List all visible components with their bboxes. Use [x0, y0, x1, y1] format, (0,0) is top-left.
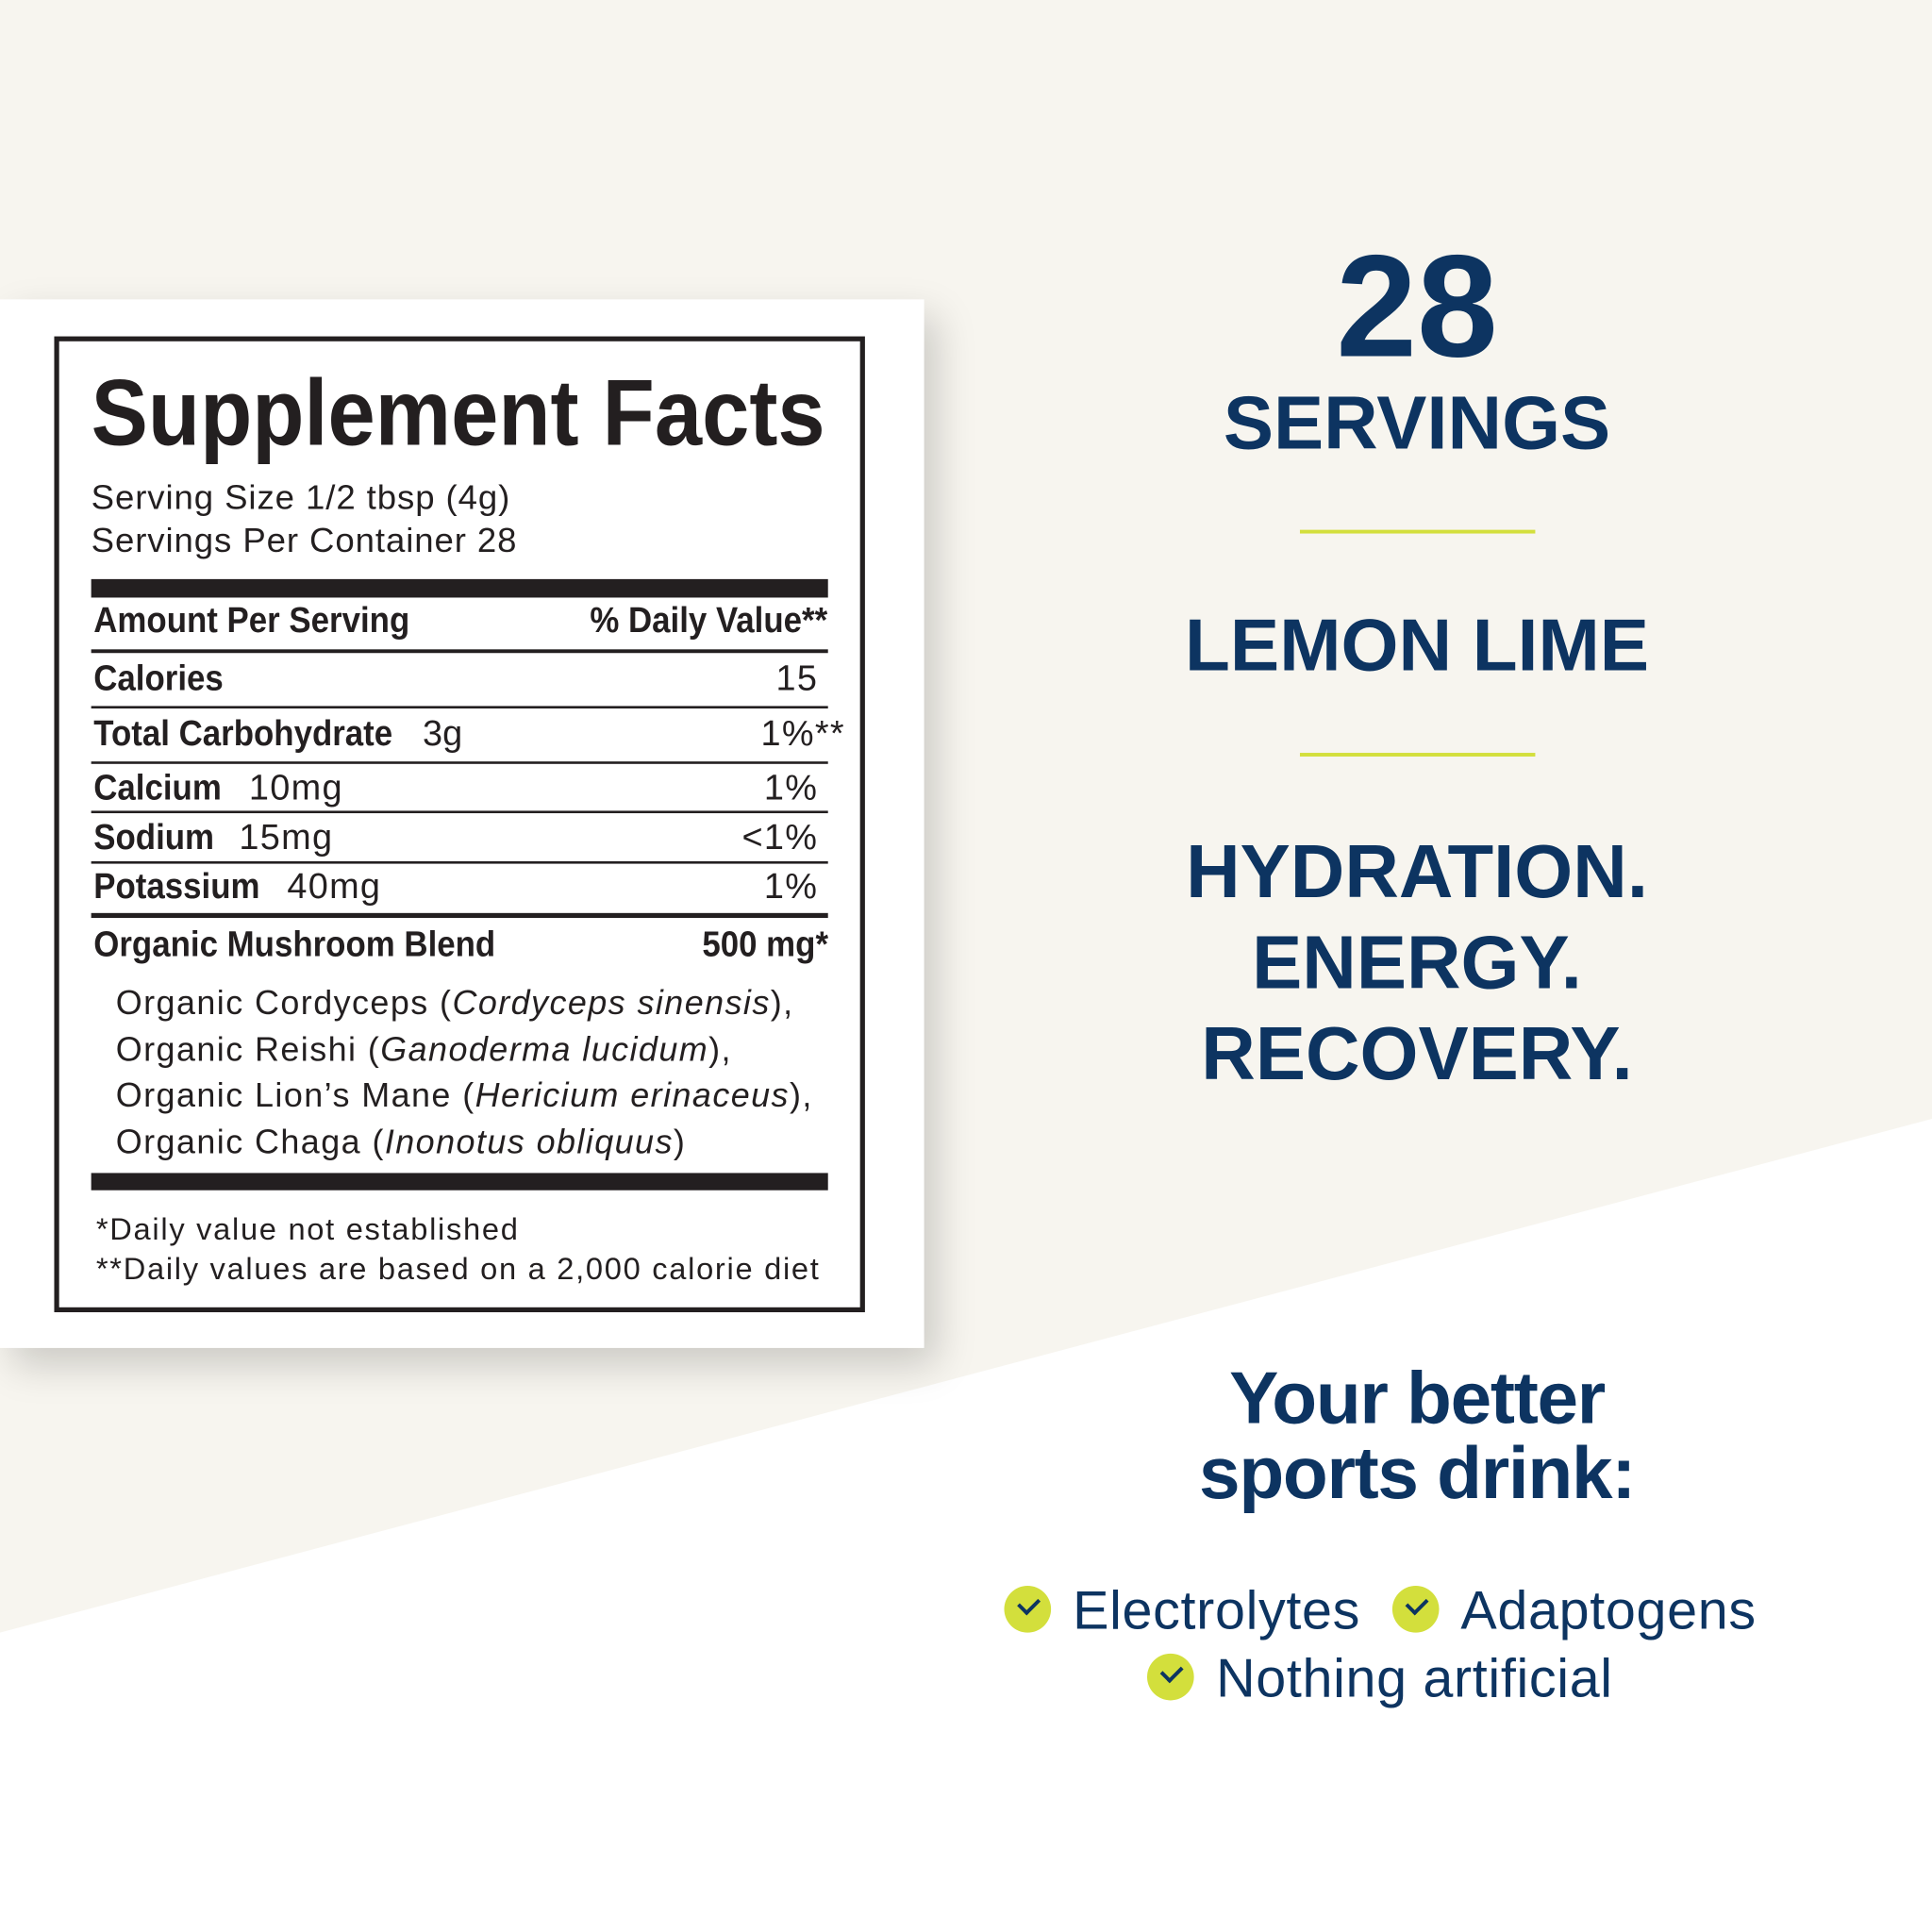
heading: hydration energy recovery: RECOVERY. [1201, 1011, 1633, 1095]
heading: hydration energy recovery [1186, 829, 1648, 1095]
text: ingredients: Organic Lion’s Mane (Hericium erinaceus), [116, 1076, 813, 1114]
heading: servings: SERVINGS [1224, 381, 1610, 464]
divider [1300, 530, 1535, 534]
serving info: Servings Per Container 28 [92, 521, 517, 559]
item: nothing artificial: Nothing artificial [1216, 1649, 1613, 1709]
row: sodium: 15mg [239, 818, 333, 858]
row: potassium: 1% [764, 868, 818, 907]
heading: your better sports drink [1199, 1357, 1635, 1514]
text: ingredients: Organic Reishi (Ganoderma lucidum), [116, 1030, 732, 1068]
row: calories: 15 [776, 659, 818, 699]
heading: Supplement Facts: Supplement Facts [92, 361, 825, 466]
row: sodium: Sodium [93, 818, 214, 858]
row: potassium [93, 868, 818, 907]
row: sodium [93, 818, 818, 858]
row: calcium: 1% [764, 769, 818, 808]
text: footnotes [96, 1212, 821, 1287]
heading: your better sports drink: Your better [1229, 1357, 1605, 1440]
heading: hydration energy recovery: ENERGY. [1252, 921, 1582, 1004]
panel: supplement facts label [54, 337, 865, 1312]
serving info: Serving Size 1/2 tbsp (4g) [92, 478, 510, 516]
divider [1300, 753, 1535, 757]
row: mushroom blend [93, 925, 828, 965]
row: potassium: Potassium [93, 868, 260, 907]
row: mushroom blend: Organic Mushroom Blend [93, 925, 495, 965]
row: potassium: 40mg [287, 868, 381, 907]
text: footnotes: *Daily value not established [96, 1212, 520, 1247]
row: carbohydrate: Total Carbohydrate [93, 715, 392, 754]
row: header: % Daily Value** [591, 601, 828, 641]
item: adaptogens: Electrolytes Adaptogens [1073, 1581, 1757, 1641]
serving info [92, 478, 517, 559]
row: calories: Calories [93, 659, 224, 699]
heading: hydration energy recovery: HYDRATION. [1186, 829, 1648, 913]
row: carbohydrate: 1%** [761, 715, 845, 754]
row: calories [93, 659, 818, 699]
panel: supplement facts card [0, 299, 924, 1348]
text: ingredients [116, 983, 813, 1161]
row: calcium [93, 769, 818, 808]
text: footnotes: **Daily values are based on a 2,000 calorie diet [96, 1252, 821, 1287]
row: header: Amount Per Serving [93, 601, 409, 641]
heading: 28: 28 [1336, 225, 1498, 388]
row: calcium: 10mg [249, 769, 343, 808]
row: mushroom blend: 500 mg* [702, 925, 828, 965]
heading: your better sports drink: sports drink: [1199, 1432, 1635, 1514]
row: calcium: Calcium [93, 769, 222, 808]
text: ingredients: Organic Cordyceps (Cordyceps sinensis), [116, 983, 794, 1022]
list: benefits [1004, 1581, 1757, 1709]
row: sodium: <1% [741, 818, 818, 858]
item: electrolytes [1004, 1581, 1757, 1641]
heading: lemon lime: LEMON LIME [1185, 604, 1649, 687]
text: ingredients: Organic Chaga (Inonotus obliquus) [116, 1123, 686, 1161]
row: carbohydrate [93, 715, 845, 754]
row: header [93, 601, 828, 641]
row: carbohydrate: 3g [423, 715, 462, 754]
